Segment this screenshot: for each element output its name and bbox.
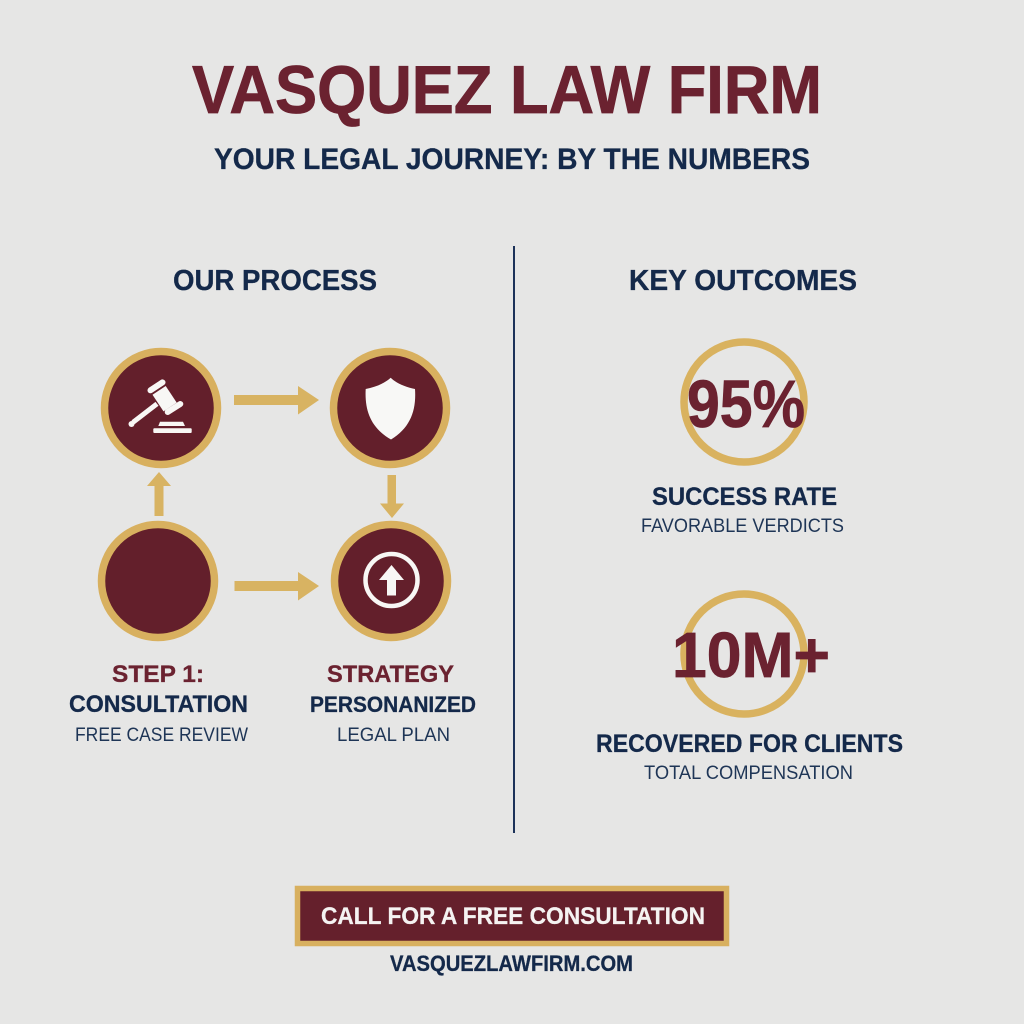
arrow: up (147, 472, 171, 516)
label: strategy: PERSONANIZED (310, 692, 476, 717)
heading: key outcomes: KEY OUTCOMES (629, 265, 857, 297)
step circle: up arrow (334, 524, 448, 638)
arrow: down (380, 475, 404, 518)
stat: recovered (596, 594, 903, 784)
stat: success rate: SUCCESS RATE (652, 483, 837, 511)
title: VASQUEZ LAW FIRM (192, 52, 822, 128)
step circle: shield (334, 352, 446, 464)
icon: shield (366, 378, 415, 440)
panel: process diagram (102, 352, 448, 638)
subtitle: YOUR LEGAL JOURNEY: BY THE NUMBERS (214, 143, 810, 176)
label: step 1 (69, 661, 248, 746)
call to action button (298, 888, 726, 944)
icon: circled up arrow (366, 554, 418, 606)
stat: recovered: RECOVERED FOR CLIENTS (596, 730, 903, 758)
stat ring (684, 342, 804, 462)
arrow: top right (234, 386, 319, 414)
step circle: blank (102, 524, 214, 638)
icon: gavel (128, 382, 192, 433)
call to action button: CALL FOR A FREE CONSULTATION (321, 903, 705, 930)
label: strategy (310, 661, 476, 746)
step circle: gavel (104, 352, 218, 464)
center divider (513, 246, 515, 833)
stat value: 10M+ (672, 619, 830, 691)
label: strategy: LEGAL PLAN (337, 725, 450, 746)
website url: VASQUEZLAWFIRM.COM (390, 951, 633, 976)
arrow: bottom right (234, 572, 319, 600)
stat value: 95% (687, 367, 805, 442)
stat ring (684, 594, 804, 714)
label: step 1: STEP 1: (112, 661, 204, 688)
label: strategy: STRATEGY (327, 661, 454, 688)
stat: success rate (641, 342, 844, 537)
label: step 1: FREE CASE REVIEW (75, 725, 248, 746)
stat: success rate: FAVORABLE VERDICTS (641, 515, 844, 537)
heading: our process: OUR PROCESS (173, 265, 377, 297)
label: step 1: CONSULTATION (69, 691, 248, 718)
stat: recovered: TOTAL COMPENSATION (644, 762, 853, 784)
